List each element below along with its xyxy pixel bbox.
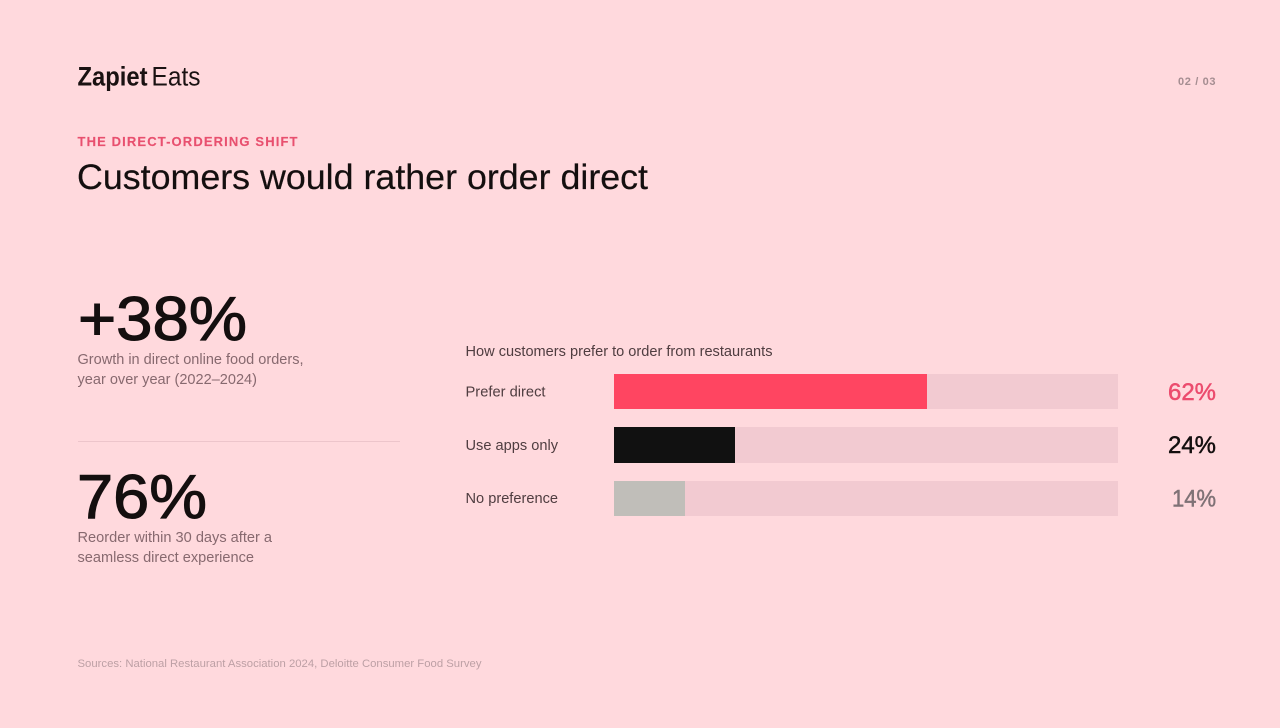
page number: 02 / 03	[1178, 76, 1216, 88]
chart title: How customers prefer to order from restaurants	[466, 344, 772, 360]
stat description: year over year (2022–2024)	[78, 372, 257, 388]
bar row: prefer direct	[466, 374, 1216, 409]
bar row: no preference: 14%	[1172, 486, 1216, 512]
bar row: use apps only: 24%	[1168, 432, 1216, 459]
title: Customers would rather order direct	[77, 158, 648, 197]
logo: Zapiet Eats: Eats	[152, 62, 200, 92]
bar row: no preference	[466, 481, 1216, 516]
stat: 76% reorder	[77, 463, 273, 566]
stat description: Growth in direct online food orders,	[78, 352, 304, 368]
stat description: Reorder within 30 days after a	[78, 530, 273, 546]
bar row: no preference: No preference	[466, 491, 558, 507]
stat description	[78, 352, 304, 388]
logo: Zapiet Eats	[78, 62, 200, 92]
bar row: use apps only	[466, 427, 1216, 463]
bar chart: order preference	[466, 344, 1216, 516]
stat: 76% reorder: 76%	[77, 463, 207, 532]
stat: +38% growth: +38%	[78, 285, 247, 354]
eyebrow: THE DIRECT-ORDERING SHIFT	[78, 134, 298, 149]
stat: +38% growth	[78, 285, 304, 388]
source note: Sources: National Restaurant Association 2024, Deloitte Consumer Food Survey	[78, 658, 482, 670]
stat description	[78, 530, 273, 566]
bar row: use apps only: Use apps only	[466, 438, 559, 454]
bar row: prefer direct: Prefer direct	[466, 384, 546, 400]
stat description: seamless direct experience	[78, 550, 254, 566]
bar row: prefer direct: 62%	[1168, 379, 1216, 406]
logo: Zapiet Eats: Zapiet	[78, 62, 148, 92]
